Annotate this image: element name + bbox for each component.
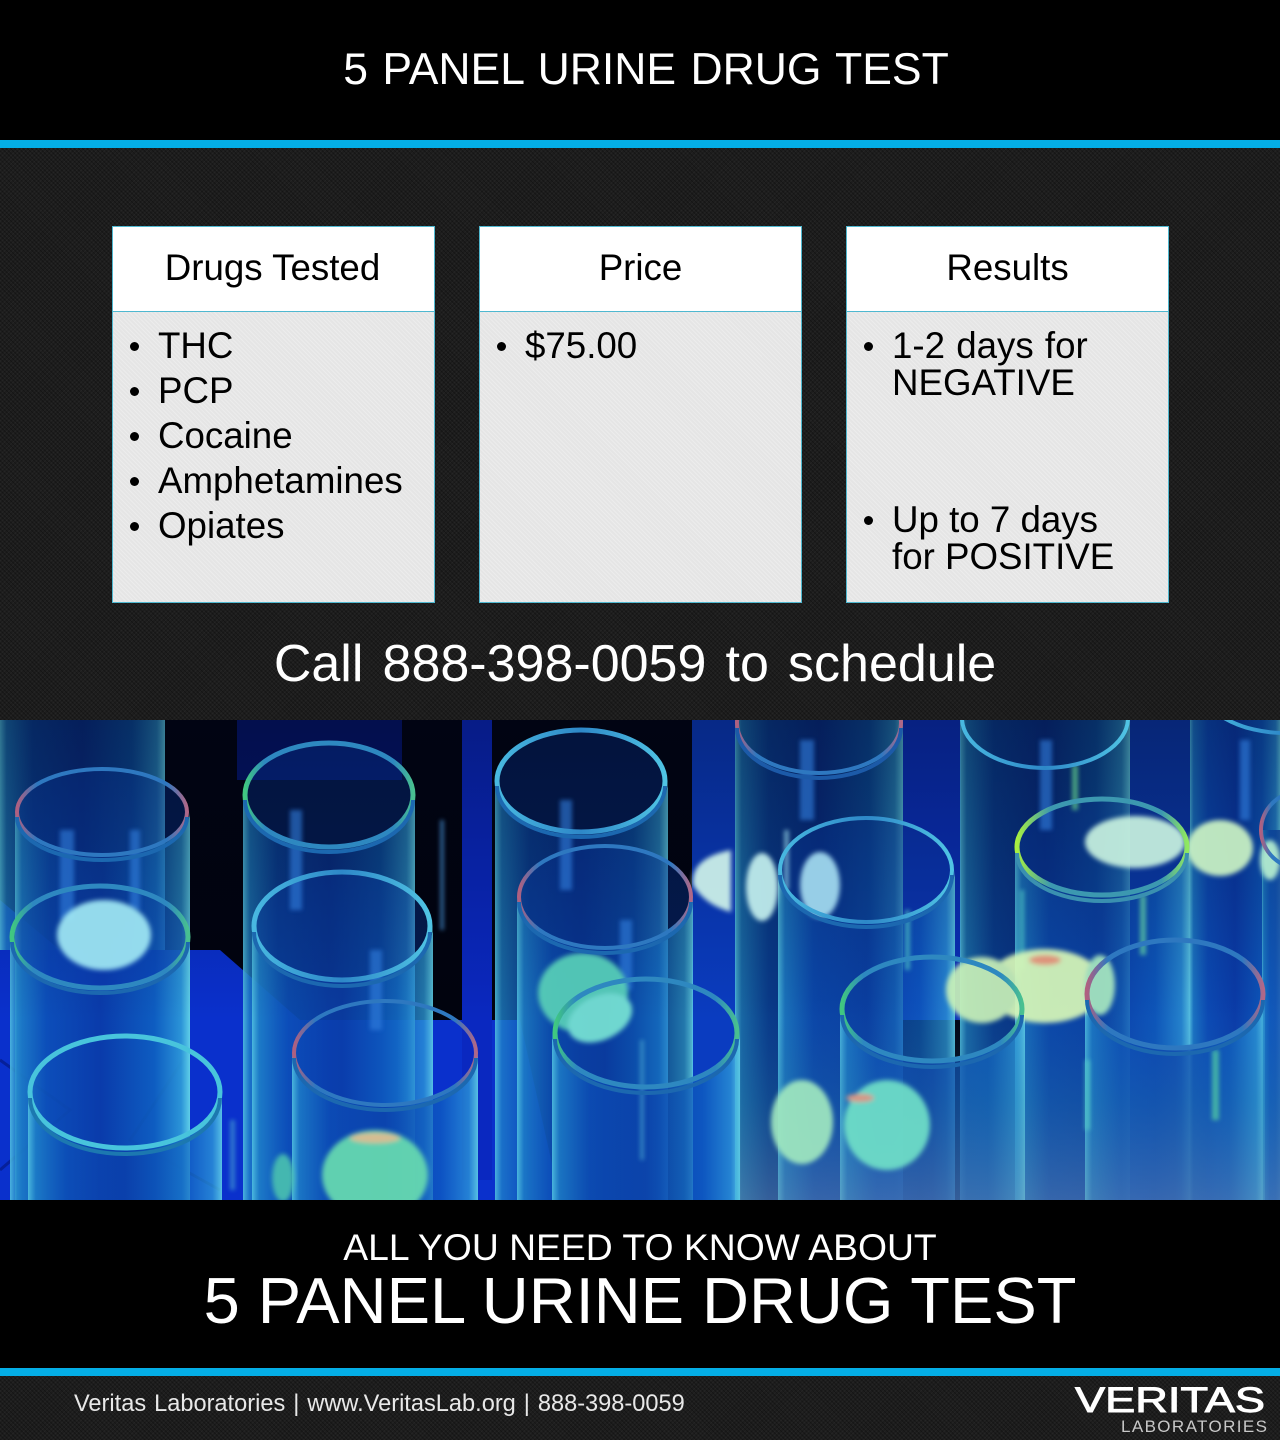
fluid glow blobs xyxy=(57,816,1280,1220)
heading: drugs tested xyxy=(113,227,434,312)
lighting overlays xyxy=(0,720,1280,1200)
subtitle: ALL YOU NEED TO KNOW ABOUT xyxy=(343,1226,937,1268)
photo: glowing test tubes xyxy=(0,720,1280,1200)
heading: results: Results xyxy=(946,247,1069,288)
lower title band xyxy=(0,1200,1280,1368)
call to action: Call 888-398-0059 to schedule xyxy=(274,635,996,693)
panel: price xyxy=(479,226,802,603)
logo: Veritas Laboratories xyxy=(1074,1381,1267,1436)
footer contact line: Veritas Laboratories | www.VeritasLab.org | 888-398-0059 xyxy=(74,1391,685,1417)
list: results: 1-2 days for xyxy=(892,325,1088,366)
heading: price xyxy=(480,227,801,312)
list: drugs: THC xyxy=(158,325,233,366)
list: drugs: Cocaine xyxy=(158,415,293,456)
heading: price: Price xyxy=(599,247,682,288)
heading: drugs tested: Drugs Tested xyxy=(165,247,380,288)
header accent bar xyxy=(0,140,1280,148)
main title: 5 PANEL URINE DRUG TEST xyxy=(204,1264,1076,1337)
tube bodies xyxy=(10,720,1280,1200)
heading: results xyxy=(847,227,1168,312)
textured info section xyxy=(0,148,1280,720)
list: price xyxy=(480,312,801,602)
panel: drugs tested xyxy=(112,226,435,603)
photo background xyxy=(0,720,1280,1200)
tube rims xyxy=(12,633,1280,1154)
rim interiors xyxy=(12,730,1187,988)
panel: results xyxy=(846,226,1169,603)
list: drugs: Opiates xyxy=(158,505,284,546)
list: drugs xyxy=(113,312,434,602)
list: results: NEGATIVE xyxy=(892,362,1075,403)
list: price: $75.00 xyxy=(525,325,637,366)
list: results xyxy=(847,312,1168,602)
header band xyxy=(0,0,1280,140)
footer band xyxy=(0,1376,1280,1440)
title: 5 PANEL URINE DRUG TEST xyxy=(343,45,949,94)
glass streaks xyxy=(60,740,1250,1190)
list: results: Up to 7 days xyxy=(892,499,1098,540)
logo: Veritas Laboratories: VERITAS xyxy=(1075,1381,1265,1420)
list: drugs: Amphetamines xyxy=(158,460,403,501)
list: drugs: PCP xyxy=(158,370,233,411)
logo: Veritas Laboratories: LABORATORIES xyxy=(1121,1417,1267,1436)
footer accent bar xyxy=(0,1368,1280,1376)
list: results: for POSITIVE xyxy=(892,536,1114,577)
